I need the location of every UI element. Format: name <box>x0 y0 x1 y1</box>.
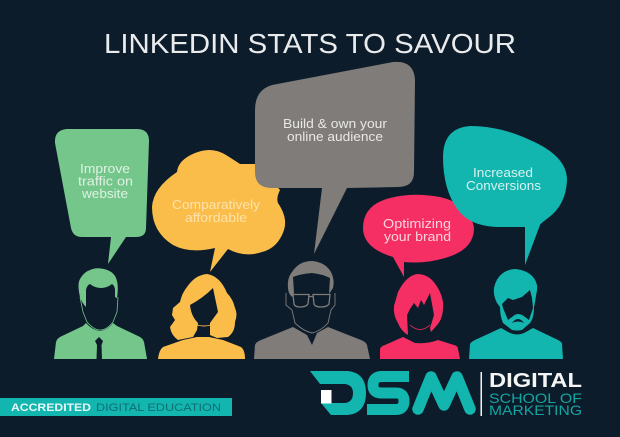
panel: teal person, increased conversions <box>443 126 567 359</box>
bubble text: improve traffic on website: website <box>81 186 128 201</box>
bubble text: optimizing your brand: your brand <box>384 229 451 244</box>
logo divider <box>480 372 482 416</box>
speech bubble: pink <box>363 195 474 277</box>
panel: grey person, build and own audience <box>254 62 415 359</box>
bubble text: build and own your online audience <box>283 116 388 144</box>
bubble text: comparatively affordable: Comparatively <box>172 197 261 212</box>
bubble text: improve traffic on website <box>78 161 133 201</box>
bubble text: optimizing your brand <box>383 216 451 244</box>
bubble text: improve traffic on website: traffic on <box>78 174 133 188</box>
bubble text: comparatively affordable: affordable <box>185 210 247 225</box>
speech bubble: yellow cloud <box>152 150 285 272</box>
person icon: man with tie <box>54 268 147 359</box>
bubble text: comparatively affordable <box>172 197 261 225</box>
speech bubble: grey <box>255 62 415 254</box>
bubble text: increased conversions <box>466 165 542 193</box>
panel: green person, improve traffic <box>54 129 149 359</box>
bubble text: build and own your online audience: online audience <box>287 129 383 144</box>
bubble text: increased conversions: Increased <box>473 165 533 180</box>
banner: accredited digital education: ACCREDITED <box>11 402 91 414</box>
speech bubble: teal <box>443 126 567 265</box>
bubble text: build and own your online audience: Build & own your <box>283 116 388 131</box>
logo: DSM digital school of marketing <box>310 370 582 418</box>
panel: yellow person, comparatively affordable <box>152 150 285 359</box>
logo text: MARKETING <box>489 402 582 418</box>
logo text: SCHOOL OF <box>489 390 582 406</box>
person icon: bearded man <box>469 269 563 359</box>
person icon: woman with curly hair <box>158 274 245 359</box>
banner: accredited digital education <box>0 398 232 416</box>
person icon: man with glasses <box>254 261 370 359</box>
person icon: woman with bob haircut <box>380 274 460 359</box>
bubble text: improve traffic on website: Improve <box>80 161 130 176</box>
banner: accredited digital education: DIGITAL EDUCATION <box>96 402 221 414</box>
bubble text: optimizing your brand: Optimizing <box>383 216 451 231</box>
panel: pink person, optimizing your brand <box>363 195 474 359</box>
speech bubble: green <box>55 129 149 264</box>
logo text: DIGITAL <box>489 370 582 392</box>
logo mark: DSM letters <box>310 371 470 415</box>
bubble text: increased conversions: Conversions <box>466 178 542 193</box>
logo text <box>489 370 582 418</box>
title: LINKEDIN STATS TO SAVOUR <box>104 28 516 59</box>
